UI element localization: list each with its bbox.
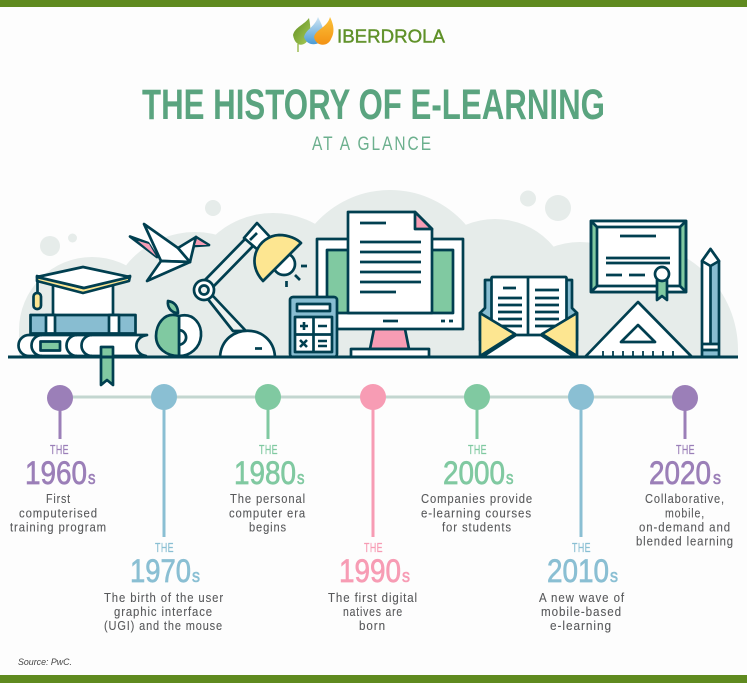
illustration: set square bbox=[585, 302, 692, 357]
illustration: apple bbox=[156, 301, 201, 356]
milestone: 2010s: mobile-based bbox=[541, 605, 622, 619]
milestone: 1990s: natives are bbox=[343, 605, 403, 619]
milestone: 1980s: computer era bbox=[229, 506, 306, 520]
milestone: 1980s: 1980 bbox=[234, 455, 296, 491]
milestone: 2000s: e-learning courses bbox=[421, 506, 532, 520]
background cloud bbox=[19, 190, 747, 467]
milestone: 1970s: The birth of the user bbox=[104, 591, 224, 605]
milestone: 2020s: THE bbox=[676, 443, 695, 457]
milestone: 1980s bbox=[229, 384, 306, 534]
milestone: 2020s: mobile, bbox=[665, 506, 705, 520]
milestone: 1980s: s bbox=[297, 468, 304, 488]
milestone: 1990s: 1990 bbox=[339, 553, 401, 589]
milestone: 1960s: THE bbox=[50, 443, 69, 457]
milestone: 2000s: for students bbox=[442, 520, 512, 534]
milestone: 1960s: 1960 bbox=[25, 455, 87, 491]
milestone: 2000s: Companies provide bbox=[421, 492, 533, 506]
illustration: calculator bbox=[290, 297, 337, 357]
milestone: 1960s: s bbox=[88, 468, 96, 488]
milestone: 2020s: blended learning bbox=[636, 534, 734, 548]
illustration: document bbox=[348, 212, 432, 313]
bottom bar bbox=[0, 675, 747, 683]
milestone: 1980s: The personal bbox=[230, 492, 306, 506]
milestone: 2000s: s bbox=[506, 468, 514, 488]
illustration: desk lamp bbox=[194, 223, 307, 357]
shelf line bbox=[8, 356, 738, 358]
milestone: 1970s: 1970 bbox=[130, 553, 191, 589]
milestone: 1990s bbox=[328, 384, 418, 633]
milestone: 2010s: s bbox=[610, 566, 618, 586]
milestone: 1980s: begins bbox=[249, 520, 287, 534]
milestone: 2010s: THE bbox=[572, 541, 591, 555]
milestone: 2000s: THE bbox=[468, 443, 487, 457]
milestone: 1990s: THE bbox=[364, 541, 383, 555]
milestone: 2020s: s bbox=[713, 468, 721, 488]
milestone: 2010s: A new wave of bbox=[539, 591, 625, 605]
milestone: 2020s: on-demand and bbox=[639, 520, 731, 534]
milestone: 1970s bbox=[104, 384, 224, 633]
milestone: 1960s: First bbox=[46, 492, 71, 506]
milestone: 1970s: THE bbox=[155, 541, 174, 555]
milestone: 1990s: born bbox=[359, 619, 386, 633]
timeline axis bbox=[60, 396, 685, 398]
milestone: 1960s bbox=[10, 385, 107, 534]
milestone: 2000s bbox=[421, 384, 533, 534]
milestone: 2020s: Collaborative, bbox=[645, 492, 725, 506]
milestone: 2020s: 2020 bbox=[649, 455, 711, 491]
illustration: books and graduation cap bbox=[18, 267, 147, 385]
milestone: 1990s: s bbox=[402, 566, 410, 586]
subtitle: AT A GLANCE bbox=[312, 133, 433, 155]
milestone: 1970s: s bbox=[192, 566, 200, 586]
milestone: 2010s bbox=[539, 384, 625, 633]
milestone: 2010s: e-learning bbox=[550, 619, 612, 633]
logo: Iberdrola bbox=[293, 17, 445, 52]
logo: Iberdrola: IBERDROLA bbox=[337, 26, 445, 46]
milestone: 1980s: THE bbox=[259, 443, 278, 457]
milestone: 1970s: (UGI) and the mouse bbox=[104, 619, 223, 633]
illustration: computer monitor bbox=[317, 239, 463, 357]
milestone: 1960s: training program bbox=[10, 520, 107, 534]
milestone: 2020s bbox=[636, 385, 734, 548]
milestone: 1970s: graphic interface bbox=[114, 605, 213, 619]
milestone: 1960s: computerised bbox=[19, 506, 98, 520]
source note: Source: PwC. bbox=[18, 657, 72, 668]
milestone: 1990s: The first digital bbox=[328, 591, 418, 605]
milestone: 2000s: 2000 bbox=[443, 455, 505, 491]
milestone: 2010s: 2010 bbox=[547, 553, 609, 589]
illustration: origami bird bbox=[130, 224, 209, 281]
illustration: pencil bbox=[702, 249, 719, 357]
illustration: envelope with open book bbox=[480, 277, 577, 357]
top bar bbox=[0, 0, 747, 7]
illustration: certificate bbox=[591, 221, 686, 300]
